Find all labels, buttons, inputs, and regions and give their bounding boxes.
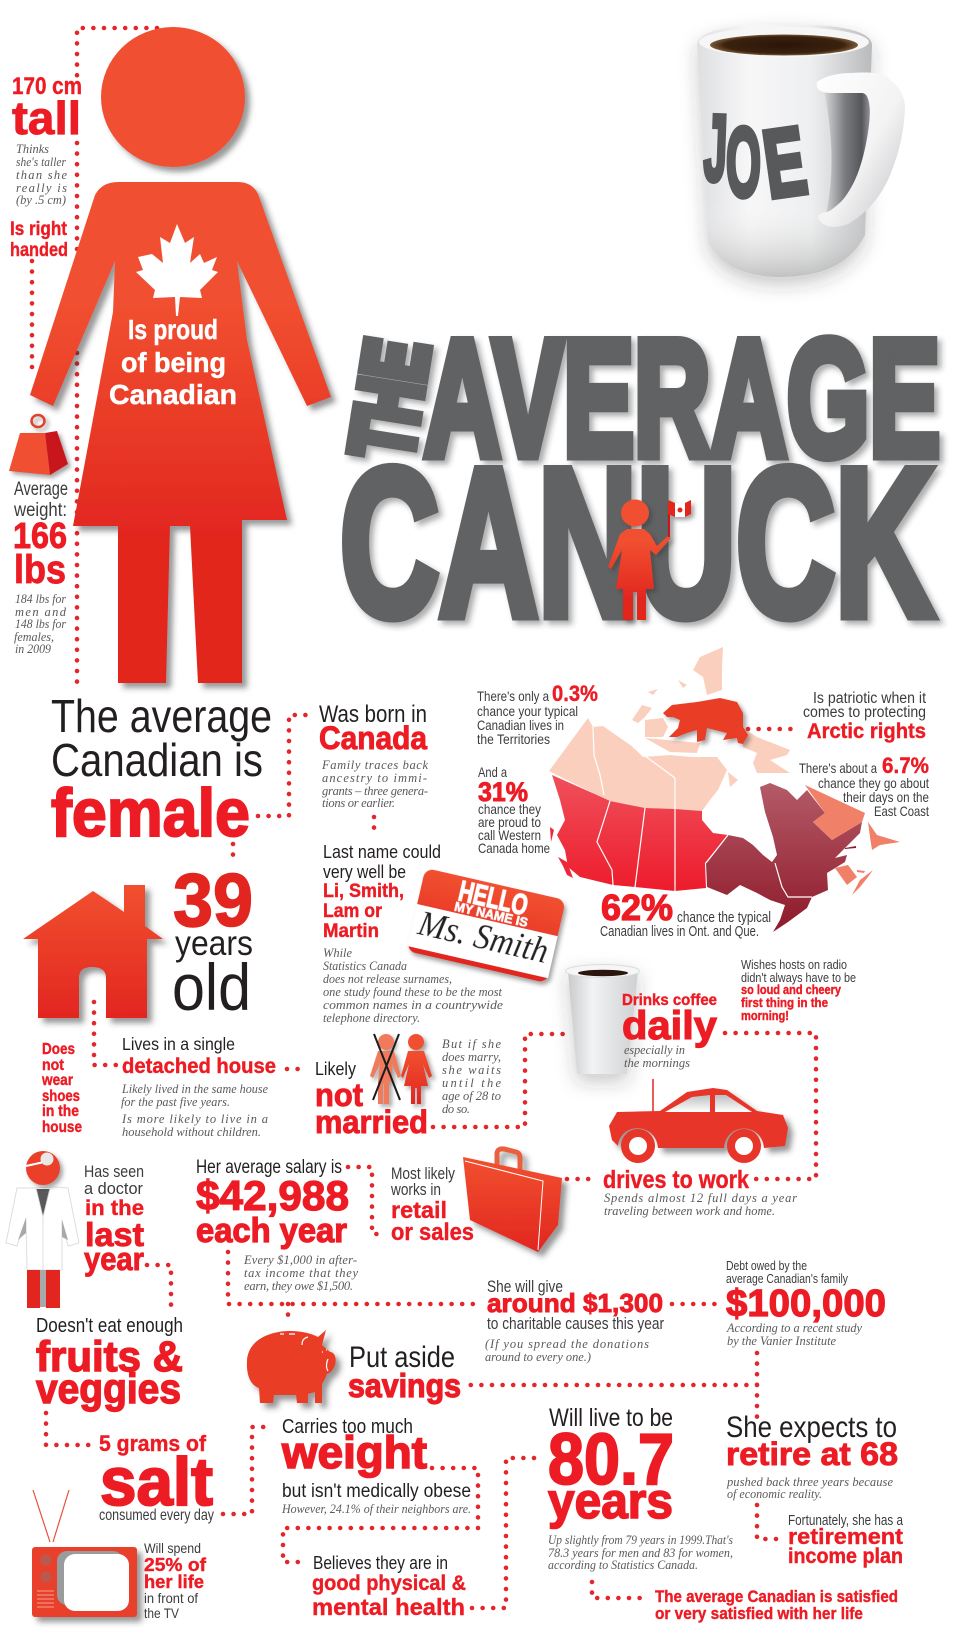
- text: east coast chance: There's about a: [799, 760, 877, 776]
- text: is proud of being Canadian: of being: [121, 347, 226, 378]
- icon: hello name tag: Ms. Smith: [414, 902, 552, 971]
- text: family debt: According to a recent study: [726, 1321, 862, 1335]
- connector: salary to retail: [348, 1167, 380, 1234]
- text: retail or sales: or sales: [391, 1219, 474, 1246]
- text: western Canada chance: 31%: [478, 777, 528, 807]
- text: retire at 68: of economic reality.: [727, 1487, 822, 1501]
- title: the average canuck: THE: [331, 333, 447, 465]
- text: retail or sales: works in: [390, 1180, 441, 1199]
- note: if she does marry: does marry,: [442, 1050, 501, 1064]
- icon: doctor: [6, 1151, 79, 1308]
- text: lifespan: according to Statistics Canada.: [548, 1558, 698, 1572]
- note: weights by sex: 184 lbs for: [15, 592, 66, 606]
- heading: the average Canadian is female: [51, 690, 272, 851]
- text: weight: weight: [281, 1427, 427, 1478]
- text: likely not married: [315, 1059, 428, 1140]
- note: if she does marry: age of 28 to: [442, 1089, 501, 1103]
- map: territories: [549, 647, 790, 811]
- text: drinks coffee daily: the mornings: [624, 1056, 690, 1070]
- text: doctor: year: [84, 1241, 144, 1277]
- text: charity: around to every one.): [485, 1350, 591, 1364]
- text: lifespan: Up slightly from 79 years in 1999.That's: [548, 1533, 733, 1547]
- text: JOE on mug: [702, 95, 813, 219]
- text: is proud of being Canadian: Canadian: [109, 379, 237, 410]
- icon: Canadian flag: [668, 500, 691, 517]
- text: salt: salt: [100, 1444, 213, 1520]
- text: television: in front of: [144, 1590, 198, 1606]
- note: family ancestry: tions or earlier.: [322, 796, 395, 810]
- text: 39 years old: 39: [173, 858, 253, 942]
- note: income owed: earn, they owe $1,500.: [244, 1279, 353, 1293]
- text: east coast chance: East Coast: [874, 803, 929, 819]
- text: good health: mental health: [312, 1594, 465, 1620]
- connector: suitcase to drives: [567, 1177, 593, 1181]
- note: weights by sex: females,: [14, 630, 54, 644]
- text: retire at 68: [726, 1411, 898, 1501]
- heading: the average Canadian is female: The average: [51, 690, 272, 742]
- text: east coast chance: chance they go about: [818, 775, 929, 791]
- text: fruits and veggies: fruits &: [36, 1333, 183, 1381]
- note: family ancestry: ancestry to immi-: [322, 771, 427, 785]
- text: last name: [323, 841, 441, 942]
- text: fruits and veggies: [36, 1315, 183, 1412]
- text: Ontario and Quebec chance: 62%: [601, 887, 673, 928]
- text: detached house: detached house: [122, 1055, 276, 1078]
- connector: health to lifespan: [472, 1458, 540, 1608]
- text: was born in Canada: [319, 701, 427, 756]
- text: charity: around $1,300: [487, 1288, 663, 1318]
- large woman figure: [30, 27, 331, 683]
- text: radio hosts: so loud and cheery: [741, 983, 841, 997]
- text: average weight 166 lbs: weight:: [13, 500, 67, 521]
- note: surnames: Statistics Canada: [323, 959, 407, 973]
- icon: polar bear: [663, 698, 748, 744]
- text: last name: Last name could: [323, 841, 441, 862]
- text: average weight 166 lbs: Average: [14, 479, 68, 500]
- text: drives to work: Spends almost 12 full days a year: [604, 1191, 797, 1205]
- note: surnames: While: [323, 946, 352, 960]
- text: weight: Carries too much: [282, 1416, 413, 1438]
- text: last name: Lam or: [323, 901, 383, 922]
- text: average weight 166 lbs: [13, 479, 68, 592]
- height dotted line: [77, 28, 157, 688]
- text: last name: Li, Smith,: [323, 881, 404, 902]
- text: last name: Martin: [323, 921, 379, 942]
- text: radio hosts: first thing in the: [741, 996, 828, 1010]
- text: fruits and veggies: veggies: [36, 1365, 181, 1412]
- icon: television: [32, 1490, 137, 1617]
- text: family debt: Debt owed by the: [726, 1259, 807, 1273]
- text: does not wear shoes: not: [42, 1057, 65, 1074]
- note: if she does marry: [442, 1037, 501, 1116]
- text: does not wear shoes: Does: [42, 1041, 75, 1058]
- note: thinks she's taller: really is: [16, 181, 67, 195]
- icon: small woman with flag: [608, 500, 691, 620]
- connector: Canada to last name: [372, 817, 376, 838]
- text: drinks coffee daily: especially in: [624, 1043, 685, 1057]
- text: satisfied with life: The average Canadian is satisfied: [655, 1587, 898, 1606]
- text: family debt: average Canadian's family: [726, 1272, 849, 1286]
- text: territories chance: Canadian lives in: [477, 717, 564, 733]
- connector: married to coffee: [433, 1034, 570, 1127]
- text: family debt: [726, 1259, 886, 1348]
- right hand dotted line: [30, 261, 34, 370]
- text: doctor: last: [85, 1216, 144, 1253]
- text: drinks coffee daily: Drinks coffee: [622, 992, 717, 1009]
- text: territories chance: There's only a: [477, 688, 549, 704]
- map: Ontario and Quebec: [706, 783, 862, 932]
- icon: maple leaf: [136, 224, 218, 316]
- text: JOE on mug: O: [726, 107, 761, 217]
- text: Ontario and Quebec chance: [600, 887, 771, 940]
- connector: weight to health: [283, 1468, 478, 1562]
- text: charity: She will give: [487, 1277, 563, 1296]
- connector: daily to drives: [725, 1033, 816, 1179]
- text: is proud of being Canadian: Is proud: [128, 314, 218, 345]
- text: last name: very well be: [323, 861, 406, 882]
- icon: Joe coffee mug: [697, 24, 905, 277]
- text: salary: $42,988: [196, 1172, 349, 1219]
- text: is right handed: [10, 219, 68, 261]
- connector: retire to plan: [757, 1505, 782, 1539]
- text: east coast chance: their days on the: [843, 789, 929, 805]
- connector: salt to weight: [223, 1427, 273, 1514]
- icon: hello name tag: [406, 867, 566, 983]
- text: salt: 5 grams of: [99, 1431, 207, 1456]
- text: retirement income plan: Fortunately, she has a: [788, 1512, 904, 1529]
- note: weights by sex: men and: [15, 605, 67, 619]
- icon: suitcase: [463, 1149, 562, 1252]
- text: lifespan: [548, 1404, 733, 1572]
- text: weight: but isn't medically obese: [282, 1481, 471, 1502]
- connector: bear to arctic rights: [748, 727, 800, 731]
- text: charity: to charitable causes this year: [487, 1315, 664, 1333]
- text: radio hosts: didn't always have to be: [741, 970, 856, 985]
- note: weights by sex: in 2009: [15, 642, 52, 656]
- text: was born in Canada: Canada: [319, 720, 427, 756]
- text: doctor: in the: [85, 1197, 144, 1220]
- text: drives to work: [603, 1166, 797, 1218]
- text: radio hosts: [741, 957, 856, 1023]
- text: radio hosts: morning!: [741, 1009, 789, 1023]
- text: doctor: a doctor: [84, 1179, 143, 1198]
- text: does not wear shoes: in the: [42, 1103, 79, 1120]
- text: was born in Canada: Was born in: [319, 701, 427, 728]
- text: lifespan: years: [548, 1473, 673, 1529]
- note: thinks she's taller: (by .5 cm): [16, 193, 66, 207]
- note: if she does marry: do so.: [442, 1102, 470, 1116]
- text: territories chance: the Territories: [477, 731, 550, 747]
- icon: house: [23, 885, 163, 1018]
- text: satisfied with life: or very satisfied with her life: [655, 1604, 863, 1623]
- text: territories chance: [477, 681, 598, 747]
- map: province borders: [593, 727, 812, 897]
- note: surnames: one study found these to be the most: [323, 985, 503, 999]
- text: JOE on mug: J: [702, 95, 729, 201]
- connector: charity to debt: [672, 1302, 715, 1306]
- text: detached house: Lives in a single: [122, 1034, 235, 1054]
- text: 39 years old: [172, 858, 253, 1024]
- text: television: her life: [144, 1572, 204, 1592]
- text: JOE on mug: E: [757, 107, 813, 219]
- text: western Canada chance: [478, 764, 550, 856]
- text: lifespan: Will live to be: [549, 1404, 673, 1432]
- connector: female to age: [231, 844, 235, 864]
- text: fruits and veggies: Doesn't eat enough: [36, 1315, 183, 1337]
- text: retirement income plan: retirement: [788, 1524, 904, 1549]
- note: if she does marry: until the: [442, 1076, 501, 1090]
- text: Ontario and Quebec chance: chance the typical: [677, 910, 771, 926]
- text: satisfied with life: [655, 1587, 898, 1623]
- note: income owed: tax income that they: [244, 1266, 358, 1280]
- text: arctic rights: comes to protecting: [803, 704, 926, 721]
- text: 170 cm tall: [12, 73, 82, 144]
- text: salary: each year: [196, 1212, 347, 1250]
- text: 170 cm tall: 170 cm: [12, 73, 82, 100]
- text: retire at 68: pushed back three years because: [726, 1475, 893, 1489]
- text: family debt: $100,000: [726, 1283, 886, 1325]
- text: savings: savings: [348, 1367, 461, 1404]
- text: 170 cm tall: tall: [12, 92, 81, 144]
- note: if she does marry: But if she: [442, 1037, 501, 1051]
- text: retire at 68: She expects to: [726, 1411, 897, 1444]
- note: income owed: Every $1,000 in after-: [243, 1253, 357, 1267]
- connector: debt to retire and savings: [468, 1353, 757, 1417]
- text: weight: [281, 1416, 471, 1516]
- icon: weight: [9, 415, 68, 475]
- icon: red car: [609, 1079, 788, 1163]
- text: television: 25% of: [144, 1555, 207, 1575]
- text: drives to work: drives to work: [603, 1166, 749, 1194]
- text: doctor: Has seen: [84, 1162, 144, 1181]
- icon: couple crossed out: [370, 1034, 432, 1104]
- text: drinks coffee daily: [622, 992, 718, 1070]
- icon: coffee cup: [566, 964, 640, 1074]
- text: western Canada chance: are proud to: [478, 814, 541, 830]
- text: detached house: Likely lived in the same house: [121, 1082, 268, 1096]
- text: 39 years old: old: [172, 950, 251, 1024]
- connector: house to detached: [94, 1002, 117, 1065]
- text: drives to work: traveling between work and home.: [604, 1204, 775, 1218]
- text: arctic rights: Arctic rights: [807, 720, 926, 743]
- note: if she does marry: she waits: [442, 1063, 501, 1077]
- text: does not wear shoes: house: [42, 1119, 82, 1136]
- heading: the average Canadian is female: female: [51, 775, 250, 851]
- text: salary: Her average salary is: [196, 1157, 342, 1178]
- text: charity: [485, 1277, 664, 1364]
- text: is proud of being Canadian: [109, 314, 237, 410]
- map: western provinces: [552, 775, 728, 891]
- note: thinks she's taller: she's taller: [16, 155, 66, 169]
- text: is right handed: Is right: [10, 219, 68, 240]
- note: family ancestry: [321, 758, 428, 810]
- map: Atlantic provinces: [805, 785, 900, 895]
- text: Ontario and Quebec chance: Canadian lives in Ont. and Que.: [600, 924, 759, 940]
- text: detached house: for the past five years.: [121, 1095, 230, 1109]
- text: is right handed: handed: [10, 240, 68, 261]
- note: thinks she's taller: than she: [16, 168, 67, 182]
- connector: salary to charity and savings: [228, 1252, 480, 1323]
- connector: house to married: [287, 1067, 308, 1071]
- title: the average canuck: [331, 306, 940, 660]
- text: arctic rights: Is patriotic when it: [813, 690, 927, 707]
- text: east coast chance: 6.7%: [882, 753, 929, 778]
- note: surnames: [323, 946, 503, 1025]
- text: retail or sales: Most likely: [391, 1164, 455, 1183]
- text: salt: consumed every day: [99, 1507, 214, 1524]
- text: good health: good physical &: [312, 1571, 466, 1595]
- text: television: [144, 1540, 207, 1621]
- text: likely not married: Likely: [315, 1059, 356, 1079]
- note: surnames: does not release surnames,: [323, 972, 452, 986]
- text: charity: (If you spread the donations: [485, 1337, 649, 1351]
- note: income owed: [243, 1253, 358, 1293]
- text: likely not married: not: [315, 1077, 363, 1113]
- text: radio hosts: Wishes hosts on radio: [741, 957, 847, 972]
- text: retail or sales: retail: [391, 1197, 447, 1223]
- text: good health: [312, 1553, 466, 1620]
- text: western Canada chance: And a: [478, 764, 507, 780]
- connector: lifespan to satisfied: [592, 1582, 645, 1598]
- text: weight: However, 24.1% of their neighbors are.: [281, 1502, 471, 1516]
- text: average weight 166 lbs: 166: [13, 515, 67, 556]
- text: western Canada chance: chance they: [478, 801, 541, 817]
- text: likely not married: married: [315, 1104, 428, 1140]
- text: arctic rights: [803, 690, 927, 743]
- text: western Canada chance: call Western: [478, 827, 541, 843]
- text: retirement income plan: [788, 1512, 904, 1568]
- text: territories chance: chance your typical: [477, 703, 578, 719]
- text: 39 years old: years: [175, 924, 253, 963]
- text: territories chance: 0.3%: [552, 681, 598, 706]
- text: salary: [196, 1157, 349, 1250]
- heading: the average Canadian is female: Canadian is: [51, 734, 263, 786]
- note: weights by sex: [14, 592, 67, 656]
- text: does not wear shoes: wear: [41, 1072, 73, 1089]
- connector: female to Canada: [258, 715, 313, 816]
- text: savings: [348, 1341, 461, 1404]
- text: does not wear shoes: shoes: [42, 1088, 80, 1105]
- text: average weight 166 lbs: lbs: [14, 548, 66, 592]
- text: television: Will spend: [144, 1540, 201, 1556]
- text: television: the TV: [144, 1605, 180, 1621]
- icon: piggy bank: [247, 1330, 336, 1403]
- map of Canada: [549, 647, 900, 932]
- icon: hello name tag: HELLO: [456, 876, 531, 922]
- connector: doctor to fruits: [147, 1265, 171, 1313]
- text: good health: Believes they are in: [313, 1553, 448, 1573]
- text: detached house: Is more likely to live in a: [121, 1112, 268, 1126]
- text: drinks coffee daily: daily: [622, 1004, 718, 1048]
- text: retail or sales: [390, 1164, 474, 1246]
- note: surnames: telephone directory.: [323, 1011, 420, 1025]
- note: weights by sex: 148 lbs for: [15, 617, 66, 631]
- text: retirement income plan: income plan: [788, 1545, 903, 1568]
- text: savings: Put aside: [349, 1341, 455, 1374]
- note: thinks she's taller: [16, 142, 67, 207]
- icon: hello name tag: MY NAME IS: [453, 899, 530, 930]
- text: doctor: [84, 1162, 144, 1277]
- text: lifespan: 80.7: [548, 1420, 674, 1500]
- text: does not wear shoes: [41, 1041, 82, 1136]
- connector: veggies to salt: [46, 1413, 92, 1445]
- note: thinks she's taller: Thinks: [16, 142, 49, 156]
- text: lifespan: 78.3 years for men and 83 for women,: [548, 1546, 733, 1560]
- note: surnames: common names in a countrywide: [323, 998, 503, 1012]
- text: western Canada chance: Canada home: [478, 840, 550, 856]
- note: family ancestry: grants – three genera-: [322, 784, 428, 798]
- note: family ancestry: Family traces back: [321, 758, 428, 772]
- text: retire at 68: retire at 68: [726, 1436, 898, 1472]
- text: detached house: household without children.: [122, 1125, 261, 1139]
- text: detached house: [121, 1034, 276, 1139]
- text: east coast chance: [799, 753, 929, 819]
- text: family debt: by the Vanier Institute: [727, 1334, 836, 1348]
